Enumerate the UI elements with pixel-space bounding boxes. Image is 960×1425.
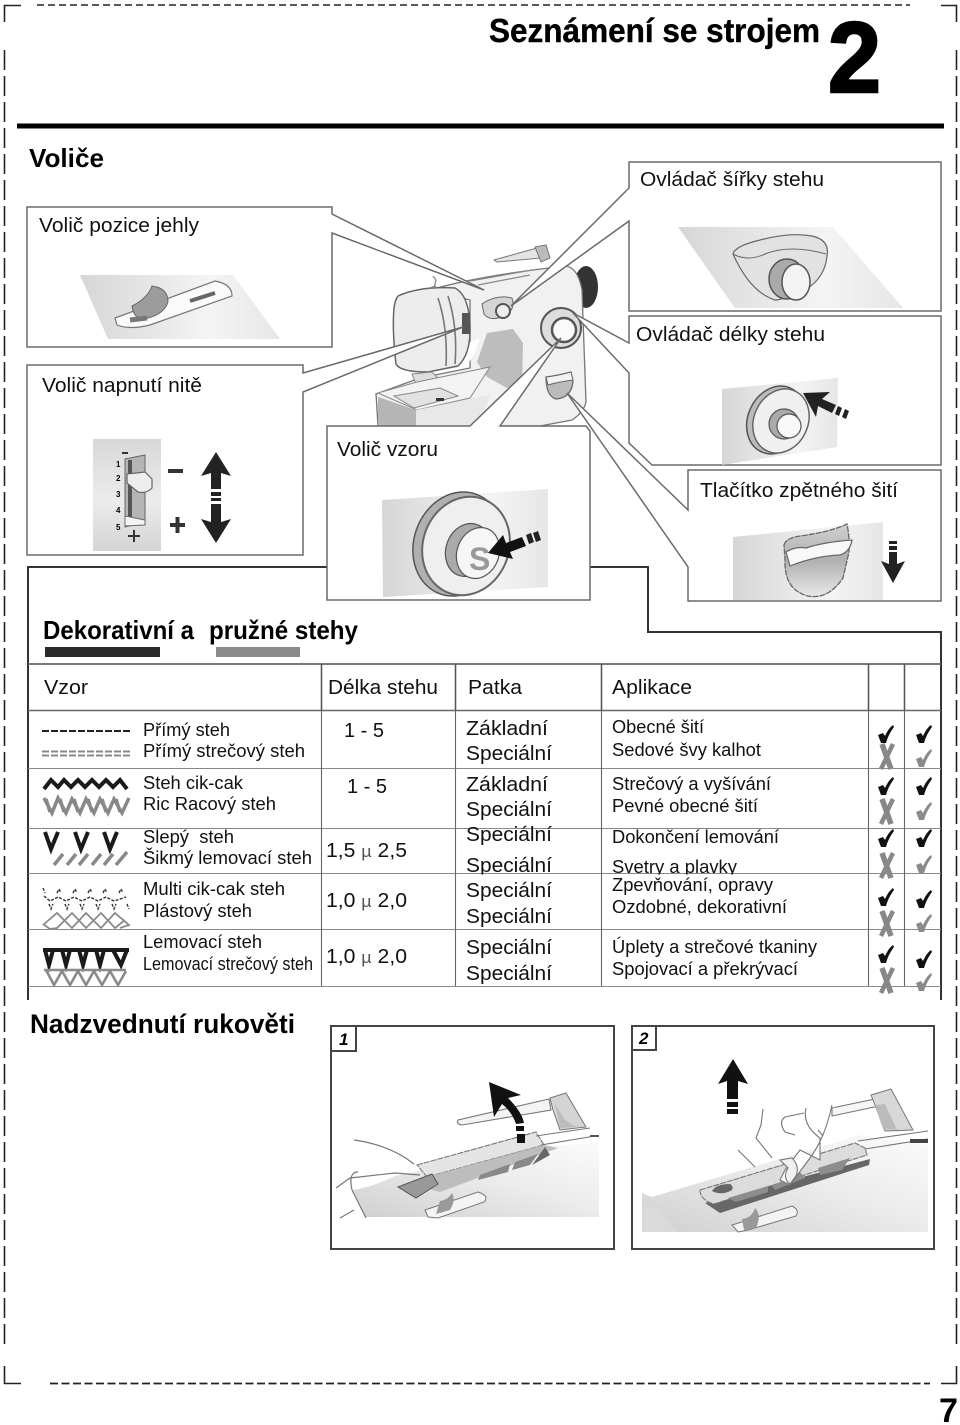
width dial	[482, 297, 513, 319]
length dial	[541, 308, 581, 348]
callout: Tlačítko zpětného šití	[567, 393, 941, 601]
label: Tlačítko zpětného šití	[700, 480, 898, 502]
column: stitch names: Lemovací strečový steh	[143, 954, 313, 974]
column: presser foot: Speciální	[466, 963, 552, 985]
column: stitch length: 1,0 µ 2,0	[326, 890, 407, 912]
column: presser foot: Speciální	[466, 906, 552, 928]
icon: tension slider	[93, 439, 231, 551]
column: applications	[462, 717, 817, 979]
column: applications: Strečový a vyšívání	[612, 774, 771, 794]
icon: pattern dial: S	[469, 541, 490, 577]
thread guide	[429, 276, 436, 288]
callout: Volič napnutí nitě	[27, 327, 463, 555]
callout: Ovládač délky stehu	[573, 313, 941, 465]
column: stitch names: Ric Racový steh	[143, 794, 276, 814]
table header: Patka	[468, 677, 523, 699]
upper bar	[458, 1099, 551, 1125]
marks: row 3	[878, 829, 932, 878]
heading rule	[17, 124, 944, 128]
column: stitch names: Multi cik-cak steh	[143, 879, 285, 899]
arm recess	[477, 329, 523, 388]
callout: Volič vzoru	[327, 338, 590, 609]
column: suitability marks	[878, 725, 932, 993]
column: presser foot: Základní	[466, 774, 548, 796]
step badge 1: 1	[339, 1030, 348, 1049]
column: presser foot	[466, 718, 552, 985]
table: stitch chart	[28, 664, 941, 993]
machine body	[376, 266, 586, 426]
column: stitch names: Přímý strečový steh	[143, 741, 305, 761]
marks: row 2	[878, 777, 932, 824]
column: stitch length: 1 - 5	[347, 776, 387, 798]
arrow	[881, 541, 905, 583]
machine head	[393, 288, 470, 372]
label: Ovládač šířky stehu	[640, 169, 824, 191]
column: stitch names: Plástový steh	[143, 901, 252, 921]
label: Ovládač délky stehu	[636, 324, 825, 346]
chapter number: 2	[828, 2, 881, 114]
slider	[425, 1192, 486, 1218]
marks: row 1	[878, 725, 932, 769]
stitch: overlock	[43, 950, 129, 965]
panel: step 1	[331, 1026, 614, 1249]
column: applications: Úplety a strečové tkaniny	[612, 936, 817, 957]
icon: tension slider: 2	[116, 474, 121, 483]
column: applications: Dokončení lemování	[612, 827, 779, 847]
icon: tension slider: 1	[116, 460, 121, 469]
arrow	[803, 392, 836, 417]
stitch: blind hem	[45, 832, 117, 849]
slider	[732, 1206, 797, 1232]
table grid	[28, 664, 941, 986]
legend bars	[45, 647, 300, 657]
heading: Dekorativní a pružné stehy: pružné stehy	[209, 615, 358, 645]
column: stitch names: Šikmý lemovací steh	[143, 847, 312, 868]
step badge 1	[331, 1026, 356, 1051]
latch	[398, 1174, 438, 1198]
column: stitch length: 1,0 µ 2,0	[326, 946, 407, 968]
column: stitch length	[326, 720, 407, 968]
column: stitch names: Lemovací steh	[143, 932, 262, 952]
icon: tension slider: 3	[116, 490, 121, 499]
illustration: handle raised	[642, 1059, 928, 1232]
column: stitch names: Slepý steh	[143, 827, 234, 847]
panel: decorative and stretch stitches frame	[28, 567, 941, 1000]
column: applications: Sedové švy kalhot	[612, 740, 761, 760]
double arrow	[201, 452, 231, 489]
bed	[378, 367, 490, 410]
stitch: honeycomb	[43, 913, 129, 929]
column: presser foot: Speciální	[466, 937, 552, 959]
up arrow	[718, 1059, 748, 1099]
table header: Vzor	[44, 677, 88, 699]
column: stitch length: 1 - 5	[344, 720, 384, 742]
stitch: stretch overlock	[44, 970, 126, 985]
label: Volič napnutí nitě	[42, 375, 202, 397]
icon: needle position slider	[80, 275, 280, 339]
step badge 2: 2	[638, 1029, 649, 1048]
column: applications: Obecné šití	[612, 717, 704, 737]
column: presser foot: Speciální	[466, 743, 552, 765]
icon: reverse button	[733, 522, 905, 600]
column: presser foot: Speciální	[466, 824, 552, 846]
icon: tension slider: 4	[116, 506, 121, 515]
column: applications: Spojovací a překrývací	[612, 959, 798, 979]
stitch: stretch straight	[42, 752, 130, 756]
curved arrow	[489, 1082, 524, 1124]
column: stitch names: Přímý steh	[143, 720, 230, 740]
stitch: slanted hem	[54, 852, 127, 865]
table header: Aplikace	[612, 677, 692, 699]
marks: row 4	[878, 888, 932, 936]
column: applications: Svetry a plavky	[612, 857, 737, 877]
arm top lines	[470, 270, 532, 285]
table header: Délka stehu	[328, 677, 438, 699]
column: stitch names	[143, 720, 313, 974]
section heading: Voliče: Voliče	[29, 143, 104, 173]
heading: Dekorativní a pružné stehy	[43, 615, 358, 645]
spool pin	[494, 248, 541, 262]
callout: Volič pozice jehly	[27, 207, 484, 347]
column: presser foot: Speciální	[466, 799, 552, 821]
icon: length dial	[722, 376, 849, 465]
column: stitch names: Steh cik-cak	[143, 773, 244, 793]
column: presser foot: Speciální	[466, 855, 552, 877]
illustration: handle being lifted	[336, 1082, 599, 1218]
column: presser foot: Speciální	[466, 880, 552, 902]
stitch: ric rac	[44, 798, 129, 813]
column: stitch length: 1,5 µ 2,5	[326, 840, 407, 862]
table header	[44, 677, 692, 699]
label: Volič vzoru	[337, 439, 438, 461]
icon: tension slider: 5	[116, 523, 121, 532]
column: pattern samples	[42, 731, 130, 985]
title: Seznámení se strojem	[489, 12, 820, 49]
step badge 2	[632, 1026, 656, 1050]
column: applications: Pevné obecné šití	[612, 796, 758, 816]
hand	[336, 1140, 420, 1188]
hand	[780, 1105, 832, 1185]
reverse button	[546, 372, 573, 399]
column: applications: Ozdobné, dekorativní	[612, 897, 787, 917]
sewing machine illustration	[376, 245, 598, 426]
column: applications: Zpevňování, opravy	[612, 875, 773, 895]
section heading: Nadzvednutí rukověti: Nadzvednutí rukověti	[30, 1009, 295, 1039]
panel: step 2	[632, 1026, 934, 1249]
label: Volič pozice jehly	[39, 215, 199, 237]
heading: Dekorativní a pružné stehy: Dekorativní a	[43, 615, 194, 645]
stitch: multi zigzag	[43, 888, 129, 909]
icon: width dial	[678, 227, 903, 308]
column: presser foot: Základní	[466, 718, 548, 740]
stitch: zigzag	[44, 780, 127, 789]
upper bar	[832, 1099, 879, 1116]
arrow	[488, 535, 526, 559]
needle bar and foot	[422, 372, 426, 398]
handwheel	[574, 266, 598, 308]
stitch: straight	[42, 730, 130, 732]
icon: pattern dial	[382, 479, 548, 609]
marks: row 5	[878, 945, 932, 993]
callout: Ovládač šířky stehu	[511, 162, 941, 311]
